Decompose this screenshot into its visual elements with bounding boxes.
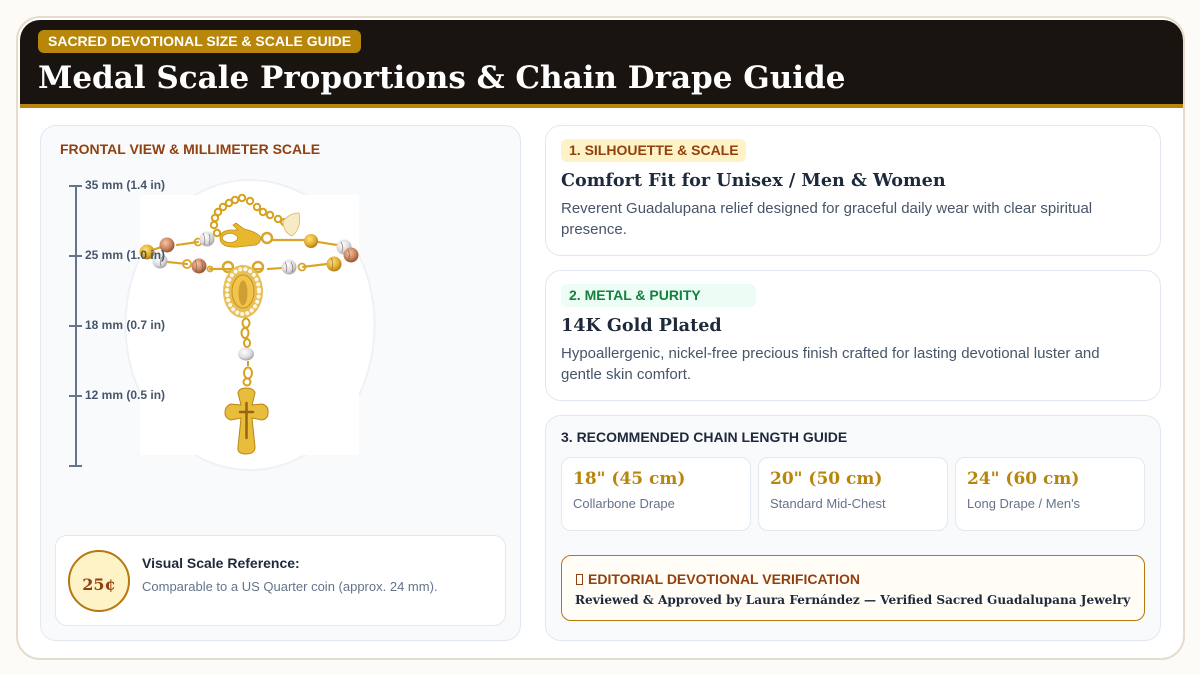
silhouette description: presence. <box>561 221 627 238</box>
chain guide heading: 3. RECOMMENDED CHAIN LENGTH GUIDE <box>561 429 847 445</box>
crucifix <box>225 388 268 454</box>
bracelet chain <box>147 238 337 272</box>
quarter coin icon <box>68 550 130 612</box>
header band <box>20 20 1183 108</box>
scale label 25 mm: 25 mm (1.0 in) <box>85 248 165 262</box>
length option 18 inch: 18" (45 cm) <box>573 469 685 489</box>
panel: silhouette and scale <box>545 125 1161 256</box>
length option 20 inch: Standard Mid-Chest <box>770 496 886 511</box>
length option 18 inch: Collarbone Drape <box>573 496 675 511</box>
length option 20 inch: 20" (50 cm) <box>770 469 882 489</box>
panel: chain length guide <box>545 415 1161 641</box>
millimeter ruler <box>69 178 165 467</box>
title: Medal Scale Proportions & Chain Drape Guide <box>38 60 845 96</box>
length option 24 inch: Long Drape / Men's <box>967 496 1080 511</box>
length option 18 inch <box>561 457 751 531</box>
coin reference heading: Visual Scale Reference: <box>142 555 300 571</box>
metal description: gentle skin comfort. <box>561 366 691 383</box>
header badge: SACRED DEVOTIONAL SIZE & SCALE GUIDE <box>48 33 351 49</box>
scale label 12 mm: 12 mm (0.5 in) <box>85 388 165 402</box>
silhouette description <box>561 200 1092 238</box>
coin reference card <box>55 535 506 626</box>
beads <box>140 232 358 360</box>
editorial verification callout <box>561 555 1145 621</box>
coin reference note: Comparable to a US Quarter coin (approx. 24 mm). <box>142 579 438 594</box>
metal tag: 2. METAL & PURITY <box>569 287 701 303</box>
header badge <box>38 30 361 53</box>
silhouette tag: 1. SILHOUETTE & SCALE <box>569 142 739 158</box>
verification heading: EDITORIAL DEVOTIONAL VERIFICATION <box>588 571 860 587</box>
heart charm <box>283 213 300 236</box>
ruler axis <box>69 185 82 467</box>
lower chain <box>242 318 252 386</box>
verification text: Reviewed & Approved by Laura Fernández — Verified Sacred Guadalupana Jewelry <box>575 593 1130 607</box>
metal heading: 14K Gold Plated <box>561 315 722 336</box>
length option 20 inch <box>758 457 948 531</box>
scale label 35 mm: 35 mm (1.4 in) <box>85 178 165 192</box>
metal description <box>561 345 1100 383</box>
metal description: Hypoallergenic, nickel-free precious finish crafted for lasting devotional luster and <box>561 345 1100 362</box>
silhouette heading: Comfort Fit for Unisex / Men & Women <box>561 170 946 191</box>
length option 24 inch <box>955 457 1145 531</box>
metal tag <box>561 284 756 307</box>
silhouette description: Reverent Guadalupana relief designed for graceful daily wear with clear spiritual <box>561 200 1092 217</box>
lobster clasp <box>220 223 272 247</box>
medal <box>223 265 263 318</box>
extender chain <box>211 195 287 236</box>
silhouette tag <box>561 139 746 162</box>
scale label 18 mm: 18 mm (0.7 in) <box>85 318 165 332</box>
quarter coin icon: 25¢ <box>82 575 116 594</box>
length option 24 inch: 24" (60 cm) <box>967 469 1079 489</box>
panel: frontal view and scale <box>40 125 521 641</box>
panel heading: FRONTAL VIEW & MILLIMETER SCALE <box>60 141 320 157</box>
jewelry illustration <box>124 179 376 471</box>
panel: metal and purity <box>545 270 1161 401</box>
